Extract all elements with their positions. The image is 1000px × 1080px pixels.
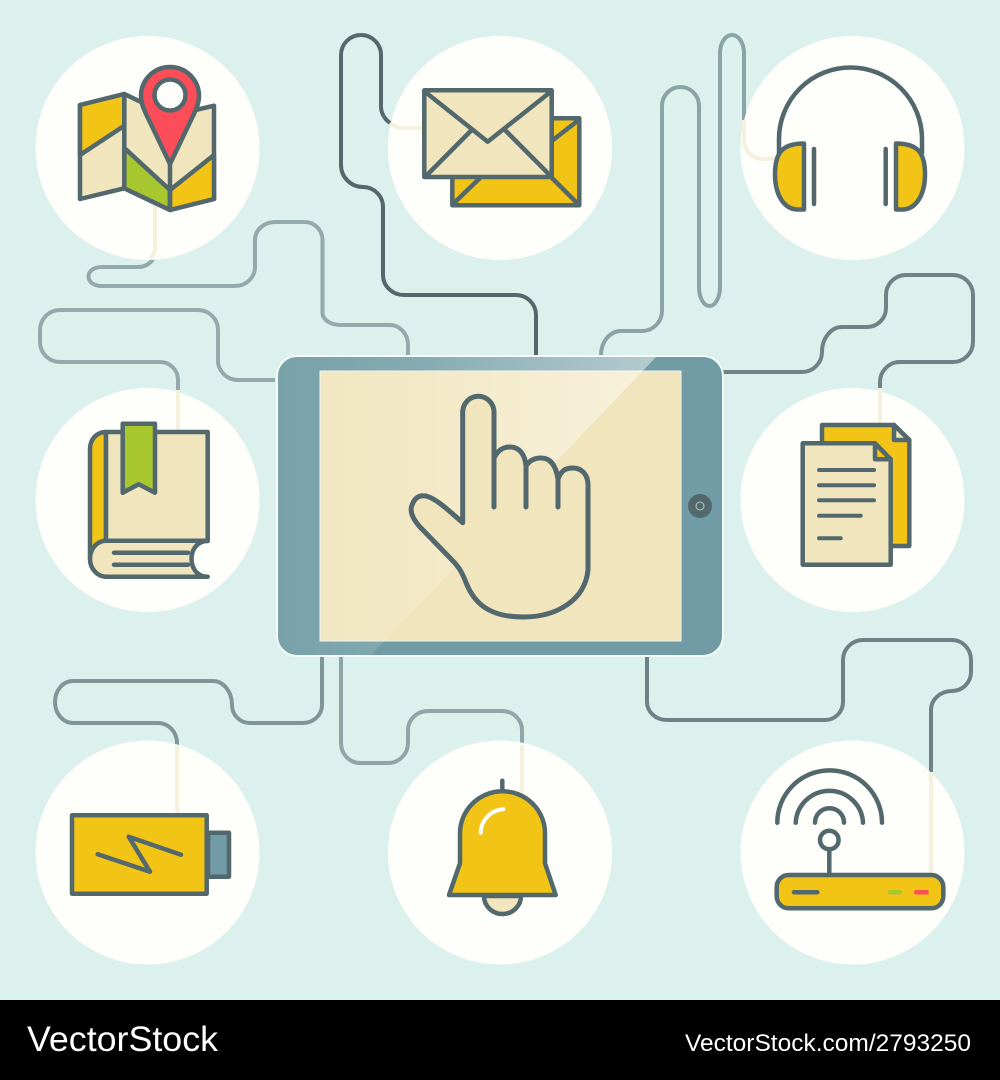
footer image id: VectorStock.com/2793250 — [685, 1030, 971, 1057]
icon: map with pin — [80, 67, 214, 210]
cable: map — [88, 222, 408, 355]
cable: book — [40, 310, 275, 392]
cable: envelope — [341, 35, 536, 355]
icon: book with bookmark — [90, 424, 208, 577]
icon: documents — [803, 425, 909, 565]
cable: bell — [341, 657, 522, 763]
circle backdrops — [36, 36, 964, 964]
tablet — [277, 356, 723, 656]
cables connecting tablet to icons — [40, 35, 973, 775]
cable: headphones — [601, 35, 744, 355]
glass reflection — [277, 356, 657, 656]
map pin — [141, 67, 199, 164]
icon: wifi router — [777, 770, 943, 908]
cable: battery — [55, 657, 322, 748]
home button — [688, 494, 712, 518]
tablet screen — [320, 371, 681, 641]
icon: envelopes — [424, 90, 579, 205]
tablet body — [277, 356, 723, 656]
cable: documents — [723, 275, 973, 392]
icon: headphones — [775, 68, 925, 210]
icon: bell — [449, 781, 556, 914]
cable: router — [647, 640, 971, 775]
icon: battery — [72, 815, 229, 894]
footer bar — [0, 1000, 1000, 1080]
footer brand: VectorStock — [27, 1020, 219, 1059]
cream cable segments inside circles — [150, 120, 931, 878]
icon: pointing hand — [411, 396, 588, 617]
